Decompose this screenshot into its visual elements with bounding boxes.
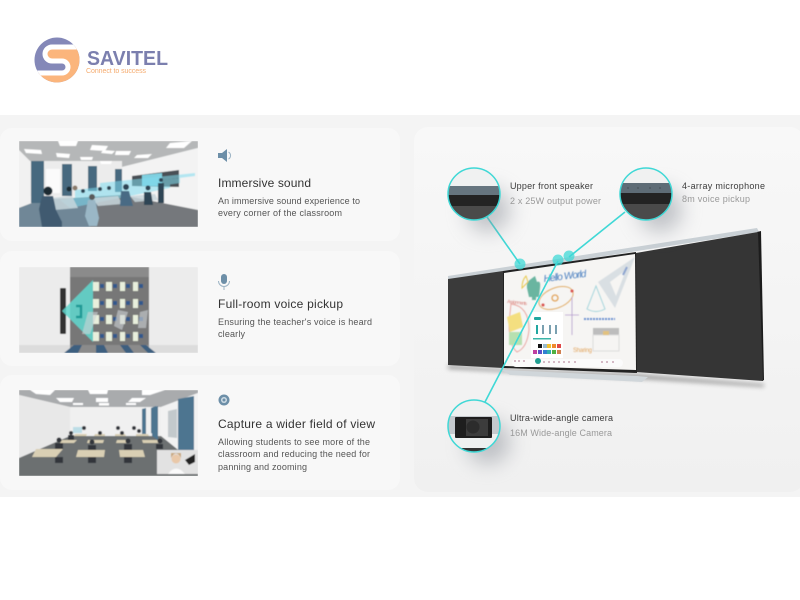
camera inset <box>157 450 198 474</box>
board <box>132 170 179 187</box>
gray content band <box>0 115 800 497</box>
floor <box>73 194 198 227</box>
curtains and window <box>178 396 194 452</box>
top silver frame <box>448 228 759 280</box>
icon: microphone <box>218 274 230 290</box>
description: Allowing students to see more of the <box>218 437 370 447</box>
whiteboard drawings: Hello World <box>543 269 587 285</box>
sublabel: 16M Wide-angle Camera <box>510 428 612 438</box>
pen settings popup <box>531 312 563 358</box>
interactive board <box>448 228 764 387</box>
icon: speaker <box>218 149 231 162</box>
whiteboard drawings: Sharing <box>573 348 592 354</box>
right wall <box>122 148 198 210</box>
whiteboard drawings: Assignments <box>507 299 528 307</box>
ceiling lights <box>30 390 165 406</box>
panel: voice pickup <box>19 267 372 353</box>
back wall <box>70 407 161 436</box>
callout: ultra-wide-angle camera <box>448 400 613 464</box>
description: Ensuring the teacher's voice is heard <box>218 317 372 327</box>
students <box>39 178 164 227</box>
floor plan image <box>19 267 198 353</box>
ceiling <box>19 390 198 407</box>
label: 4-array microphone <box>682 181 765 191</box>
classroom image with sound beams <box>19 141 198 227</box>
students <box>55 426 163 463</box>
back wall <box>44 160 122 168</box>
logo tagline: Connect to success <box>86 68 146 75</box>
panel: immersive sound <box>19 141 360 227</box>
callout: 4-array microphone <box>620 168 765 232</box>
panel: wider field of view <box>19 390 375 476</box>
ceiling <box>19 141 198 167</box>
screen frame <box>503 252 637 373</box>
desks <box>32 434 159 457</box>
desks <box>50 194 158 210</box>
callout: upper front speaker <box>448 168 601 232</box>
tray <box>498 368 648 382</box>
description <box>218 317 372 339</box>
panel: product diagram <box>446 167 766 476</box>
heading: Full-room voice pickup <box>218 297 343 311</box>
floor <box>19 436 198 476</box>
logo wordmark: SAVITEL <box>87 48 168 70</box>
description: An immersive sound experience to <box>218 196 360 206</box>
description: clearly <box>218 329 246 339</box>
description: classroom and reducing the need for <box>218 449 370 459</box>
description <box>218 196 360 218</box>
icon: camera <box>218 394 230 406</box>
heading: Capture a wider field of view <box>218 417 375 431</box>
right black panel <box>636 232 763 381</box>
left wall <box>19 395 70 458</box>
description: every corner of the classroom <box>218 208 342 218</box>
description: panning and zooming <box>218 462 307 472</box>
label: Ultra-wide-angle camera <box>510 413 613 423</box>
logo <box>34 38 168 82</box>
left black panel <box>448 271 503 368</box>
description <box>218 437 370 472</box>
sublabel: 2 x 25W output power <box>510 196 601 206</box>
right edge <box>757 231 764 381</box>
whiteboard drawings <box>507 257 635 354</box>
logo mark <box>34 38 80 82</box>
toolbar <box>512 358 623 367</box>
callout lines and nodes <box>485 212 625 402</box>
curtains <box>31 161 44 203</box>
screen <box>504 254 636 370</box>
heading: Immersive sound <box>218 176 311 190</box>
classroom image with camera inset <box>19 390 198 476</box>
sound beams <box>72 172 196 207</box>
ceiling lights <box>24 141 192 164</box>
label: Upper front speaker <box>510 181 593 191</box>
sublabel: 8m voice pickup <box>682 194 750 204</box>
right wall <box>161 393 198 470</box>
